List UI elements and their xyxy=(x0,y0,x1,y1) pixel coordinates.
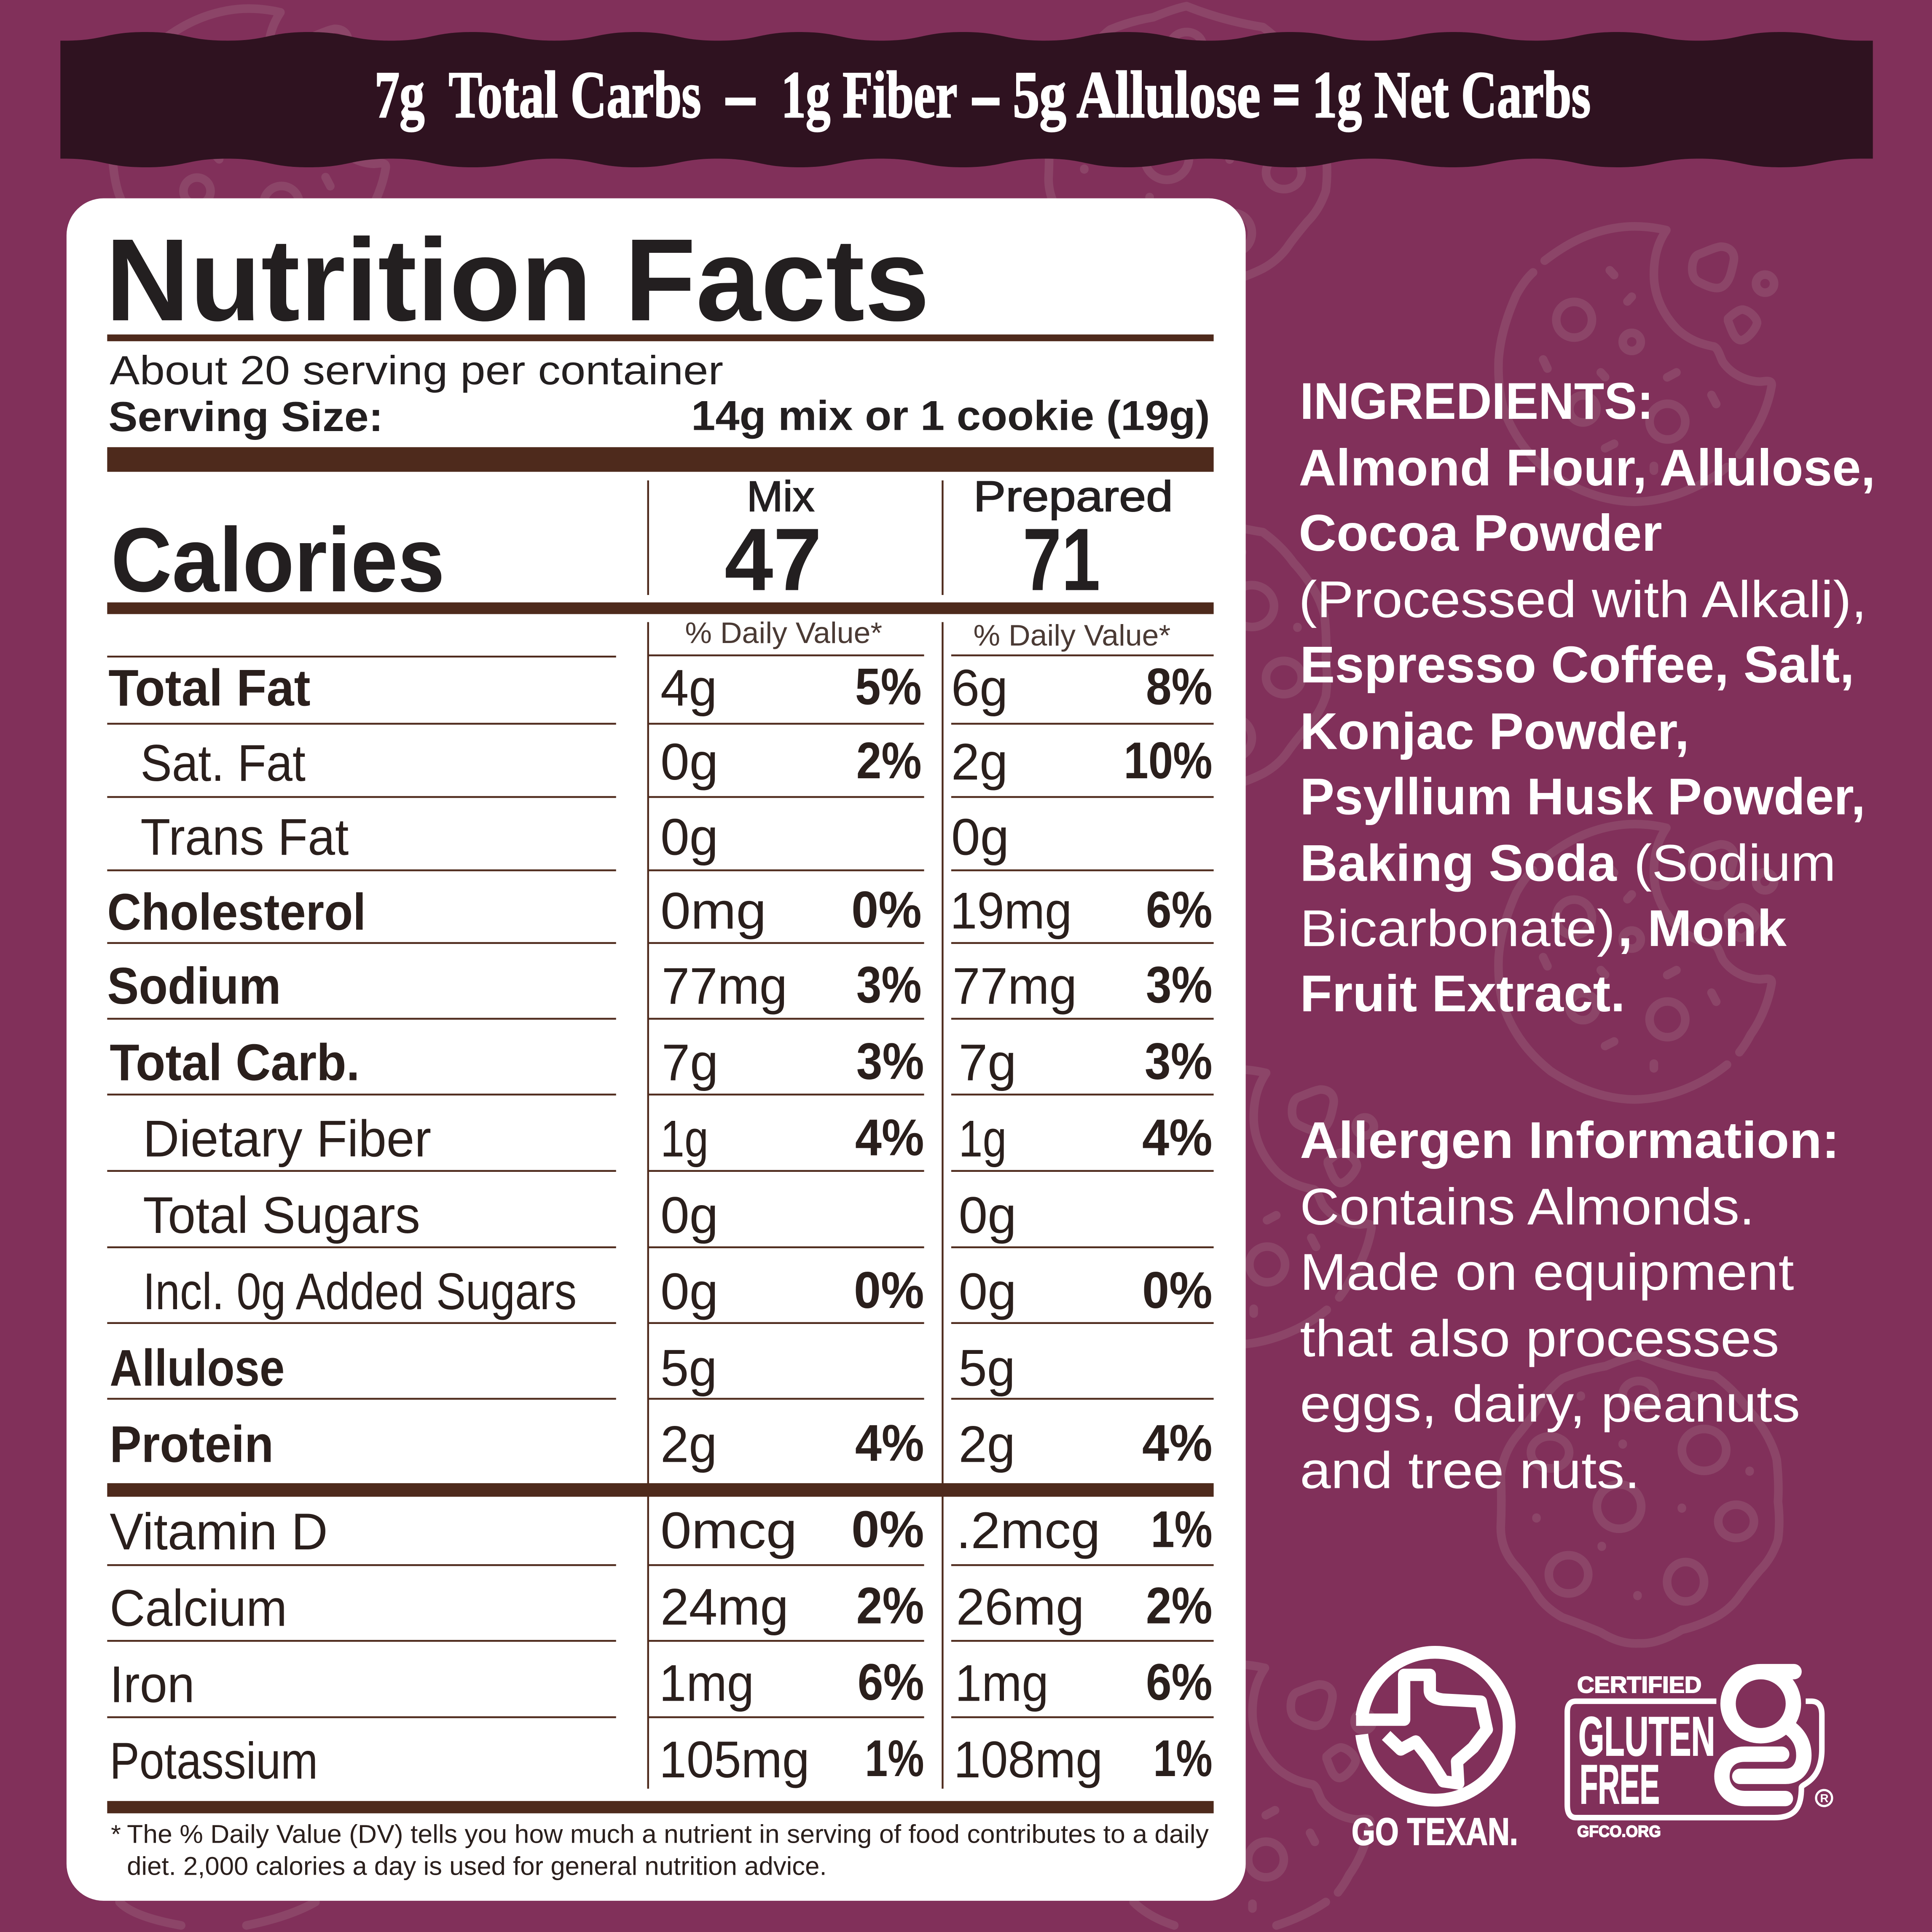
row: Sodium: 77mg xyxy=(953,957,1077,1015)
row: Iron: 1mg xyxy=(955,1655,1049,1712)
calories column: mix: Mix xyxy=(747,472,814,520)
row: Calcium: Calcium xyxy=(110,1579,287,1637)
icon: Certified Gluten Free logo: GLUTEN xyxy=(1578,1705,1715,1767)
row: Added Sugars: 0g xyxy=(958,1263,1017,1321)
heading: Nutrition Facts: Nutrition Facts xyxy=(105,214,930,345)
calories label: Calories xyxy=(111,509,445,611)
daily value headers: % Daily Value* xyxy=(685,616,882,649)
row: Iron: 1mg xyxy=(659,1655,754,1712)
row: Sat. Fat: 2% xyxy=(856,732,922,790)
banner formula text: = xyxy=(1273,58,1300,132)
icon: Certified Gluten Free logo: GFCO.ORG xyxy=(1577,1823,1661,1841)
text block: allergen information: Allergen Information: xyxy=(1300,1112,1840,1169)
row: Total Sugars xyxy=(143,1187,1017,1244)
icon: Certified Gluten Free logo xyxy=(1567,1672,1832,1841)
row: Sodium: 77mg xyxy=(662,957,787,1015)
row: Potassium: 108mg xyxy=(954,1731,1103,1789)
banner formula text: 5g Allulose xyxy=(1013,58,1261,132)
row: Added Sugars xyxy=(143,1262,1213,1321)
row: Protein: Protein xyxy=(110,1416,274,1474)
calories column: prepared: 71 xyxy=(1022,509,1100,609)
row: Trans Fat: 0g xyxy=(660,808,718,866)
row: Allulose xyxy=(110,1339,1015,1397)
text block: ingredients: , Monk xyxy=(1618,900,1787,957)
text block: allergen information: and tree nuts. xyxy=(1300,1442,1640,1500)
row: Iron: 6% xyxy=(1146,1653,1213,1711)
text block: ingredients: Konjac Powder, xyxy=(1300,702,1689,760)
row: Added Sugars: 0g xyxy=(660,1263,718,1321)
serving size: Serving Size: xyxy=(108,394,383,440)
row: Dietary Fiber: Dietary Fiber xyxy=(143,1110,431,1168)
row: Total Carb: 7g xyxy=(958,1034,1017,1091)
banner formula text: 1g Net Carbs xyxy=(1312,58,1591,132)
row: Total Fat xyxy=(108,658,1213,717)
row: Dietary Fiber: 4% xyxy=(1142,1109,1213,1167)
icon: Certified Gluten Free logo: CERTIFIED xyxy=(1577,1672,1701,1698)
banner formula text xyxy=(375,58,1591,132)
row: Sodium: 3% xyxy=(1146,956,1213,1014)
row: Allulose: 5g xyxy=(958,1339,1015,1397)
serving size: 14g mix or 1 cookie (19g) xyxy=(691,392,1210,439)
row: Calcium xyxy=(110,1577,1213,1637)
row: Total Fat: 4g xyxy=(660,659,717,717)
row: Total Fat: 8% xyxy=(1146,658,1213,716)
row: Sat. Fat: 0g xyxy=(660,733,718,791)
footnote: diet. 2,000 calories a day is used for general nutrition advice. xyxy=(127,1852,827,1881)
daily value headers xyxy=(685,616,1170,652)
row: Trans Fat xyxy=(140,808,1009,866)
row: Potassium: Potassium xyxy=(110,1732,318,1790)
row: Total Carb: 3% xyxy=(856,1032,924,1090)
text block: ingredients: Baking Soda xyxy=(1300,834,1617,892)
row: Allulose: Allulose xyxy=(110,1339,284,1397)
text block: allergen information: that also processes xyxy=(1300,1310,1779,1368)
row: Allulose: 5g xyxy=(660,1339,717,1397)
row: Cholesterol: 6% xyxy=(1146,881,1213,939)
text block: ingredients: Fruit Extract. xyxy=(1300,965,1625,1023)
row: Protein: 4% xyxy=(855,1415,924,1472)
icon: Certified Gluten Free logo: FREE xyxy=(1580,1753,1660,1815)
row: Trans Fat: Trans Fat xyxy=(140,808,349,866)
row: Sat. Fat: 2g xyxy=(951,733,1008,791)
servings per container: About 20 serving per container xyxy=(110,348,723,393)
row: Protein: 4% xyxy=(1142,1415,1213,1472)
row: Protein: 2g xyxy=(660,1416,717,1474)
banner formula text: – xyxy=(973,58,999,132)
row: Calcium: 2% xyxy=(856,1577,924,1635)
top divider bars xyxy=(107,335,1214,1813)
row: Sodium xyxy=(107,956,1213,1015)
row: Added Sugars: 0% xyxy=(854,1262,924,1319)
calories column: mix: 47 xyxy=(724,509,822,609)
serving size xyxy=(108,392,1210,440)
row: Protein: 2g xyxy=(958,1416,1015,1474)
row: Vitamin D: 0% xyxy=(851,1501,924,1558)
panel: nutrition facts card xyxy=(67,198,1246,1901)
row: Vitamin D: 0mcg xyxy=(660,1502,797,1560)
row: Iron: Iron xyxy=(110,1656,195,1714)
text block: ingredients: Almond Flour, Allulose, xyxy=(1299,439,1876,497)
row: Potassium: 1% xyxy=(865,1730,924,1787)
calories column: prepared: Prepared xyxy=(974,472,1173,520)
row: Total Sugars: Total Sugars xyxy=(143,1187,420,1244)
row: Potassium: 105mg xyxy=(659,1731,810,1789)
footnote xyxy=(111,1820,1209,1881)
row: Added Sugars: 0% xyxy=(1142,1262,1213,1319)
row: Sat. Fat: Sat. Fat xyxy=(140,734,306,792)
row: Total Carb: 3% xyxy=(1145,1032,1213,1090)
banner formula text: 1g Fiber xyxy=(781,58,958,132)
row: Total Fat: 6g xyxy=(951,659,1008,717)
text block: allergen information: Made on equipment xyxy=(1300,1243,1794,1301)
row: Vitamin D: .2mcg xyxy=(956,1502,1100,1560)
banner formula text: 7g Total Carbs xyxy=(375,58,701,132)
icon: Go Texan logo: GO TEXAN. xyxy=(1352,1811,1518,1853)
row: Potassium: 1% xyxy=(1153,1730,1213,1787)
text block: ingredients: Cocoa Powder xyxy=(1299,504,1662,562)
row: Total Sugars: 0g xyxy=(958,1187,1017,1244)
banner xyxy=(60,32,1873,167)
icon: Certified Gluten Free logo: R xyxy=(1820,1792,1829,1805)
row: Dietary Fiber xyxy=(143,1109,1213,1168)
text block: allergen information: Contains Almonds. xyxy=(1300,1178,1755,1236)
row: Sat. Fat: 10% xyxy=(1124,732,1213,790)
calories column: prepared xyxy=(974,472,1173,609)
nutrient table rows xyxy=(107,658,1213,1790)
row: Cholesterol: 0mg xyxy=(660,882,766,940)
row: Calcium: 24mg xyxy=(660,1578,789,1636)
row: Iron xyxy=(110,1653,1213,1714)
row: Dietary Fiber: 1g xyxy=(958,1110,1006,1168)
text block: ingredients: Espresso Coffee, Salt, xyxy=(1300,636,1854,694)
row: Calcium: 26mg xyxy=(956,1578,1084,1636)
row: Potassium xyxy=(110,1730,1213,1790)
icon: Go Texan logo xyxy=(1352,1652,1518,1853)
text block: ingredients: Psyllium Husk Powder, xyxy=(1300,768,1865,825)
row: Trans Fat: 0g xyxy=(951,808,1009,866)
row: Sodium: 3% xyxy=(856,956,922,1014)
row: Total Fat: Total Fat xyxy=(108,659,311,717)
row: Total Carb xyxy=(110,1032,1213,1091)
row: Dietary Fiber: 4% xyxy=(855,1109,924,1167)
row: Total Fat: 5% xyxy=(855,658,922,716)
row: Total Sugars: 0g xyxy=(660,1187,718,1244)
text block: ingredients: (Sodium xyxy=(1634,834,1836,892)
row: Cholesterol: Cholesterol xyxy=(107,884,366,941)
row: Vitamin D xyxy=(110,1501,1213,1561)
text block: allergen information: eggs, dairy, peanuts xyxy=(1300,1375,1800,1433)
row: Vitamin D: 1% xyxy=(1151,1501,1213,1558)
table rule lines xyxy=(107,655,1214,1717)
row: Iron: 6% xyxy=(858,1653,924,1711)
row: Sat. Fat xyxy=(140,732,1213,792)
row: Dietary Fiber: 1g xyxy=(660,1110,708,1168)
column separators xyxy=(648,480,942,1789)
row: Added Sugars: Incl. 0g Added Sugars xyxy=(143,1263,577,1321)
row: Total Carb: 7g xyxy=(662,1034,718,1091)
footnote: * xyxy=(111,1820,121,1849)
text block: ingredients: INGREDIENTS: xyxy=(1300,372,1653,430)
row: Cholesterol: 19mg xyxy=(950,882,1072,940)
footnote: The % Daily Value (DV) tells you how much a nutrient in serving of food contributes to a daily xyxy=(127,1820,1209,1849)
row: Cholesterol xyxy=(107,881,1213,941)
daily value headers: % Daily Value* xyxy=(974,619,1170,652)
row: Total Carb: Total Carb. xyxy=(110,1034,360,1091)
row: Cholesterol: 0% xyxy=(851,881,922,939)
row: Calcium: 2% xyxy=(1146,1577,1213,1635)
row: Sodium: Sodium xyxy=(107,957,281,1015)
row: Protein xyxy=(110,1415,1213,1474)
banner formula text: – xyxy=(726,58,755,132)
text block: allergen information xyxy=(1300,1112,1840,1500)
text block: ingredients: (Processed with Alkali), xyxy=(1299,571,1867,629)
text block: ingredients xyxy=(1299,372,1876,1023)
text block: ingredients: Bicarbonate) xyxy=(1300,900,1615,957)
row: Vitamin D: Vitamin D xyxy=(110,1503,328,1561)
